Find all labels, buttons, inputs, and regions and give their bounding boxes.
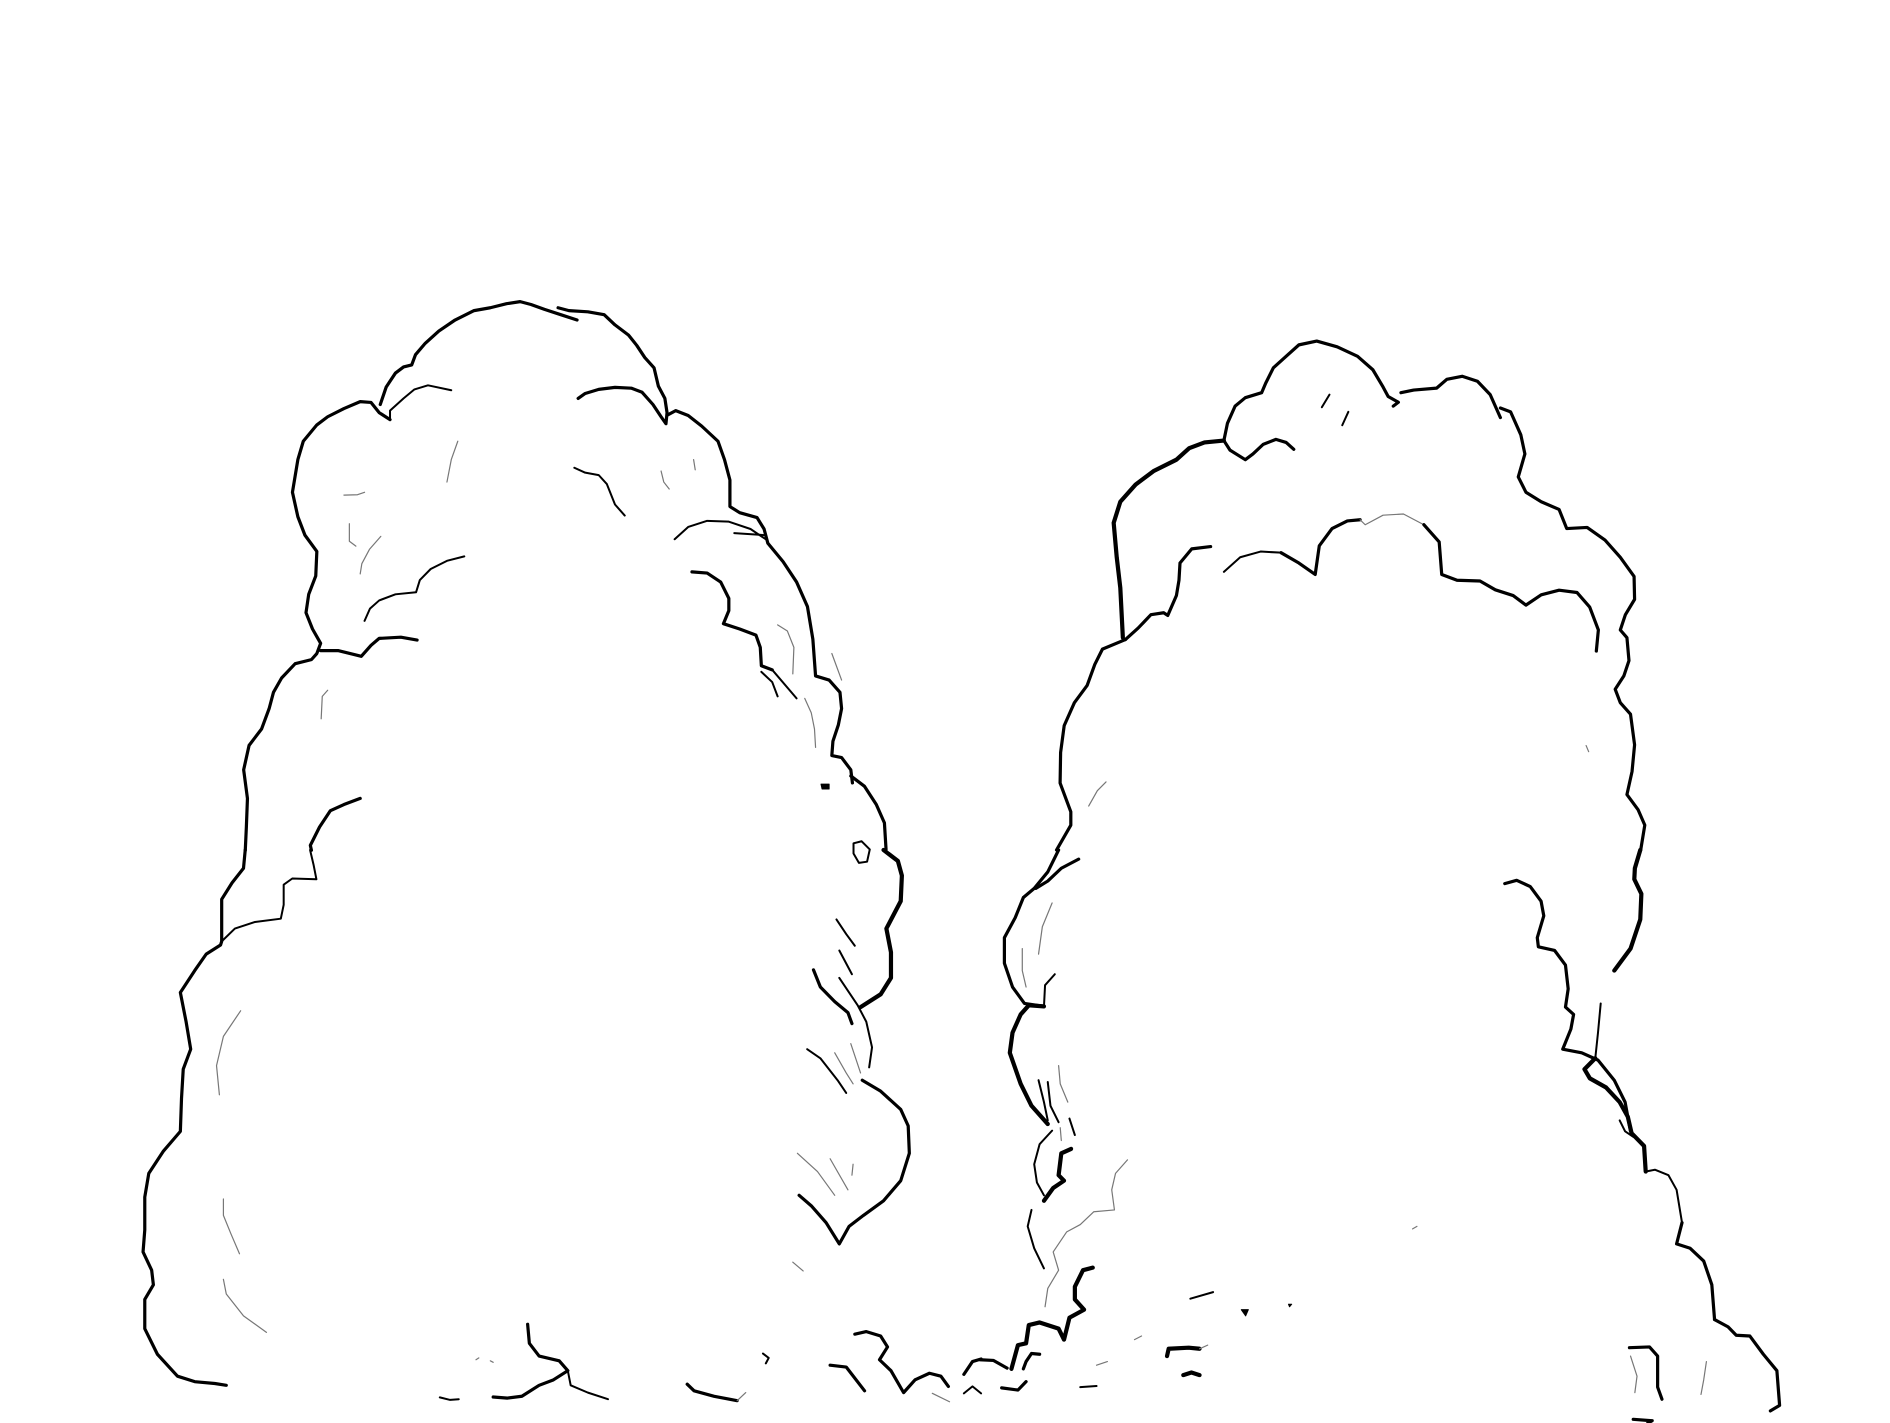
left cloud [143,302,981,1402]
left cloud: lower section [143,850,981,1402]
right cloud: lower section [980,850,1780,1423]
left cloud: upper section [244,302,886,863]
right cloud: upper section [1057,341,1645,850]
right cloud [980,341,1780,1423]
